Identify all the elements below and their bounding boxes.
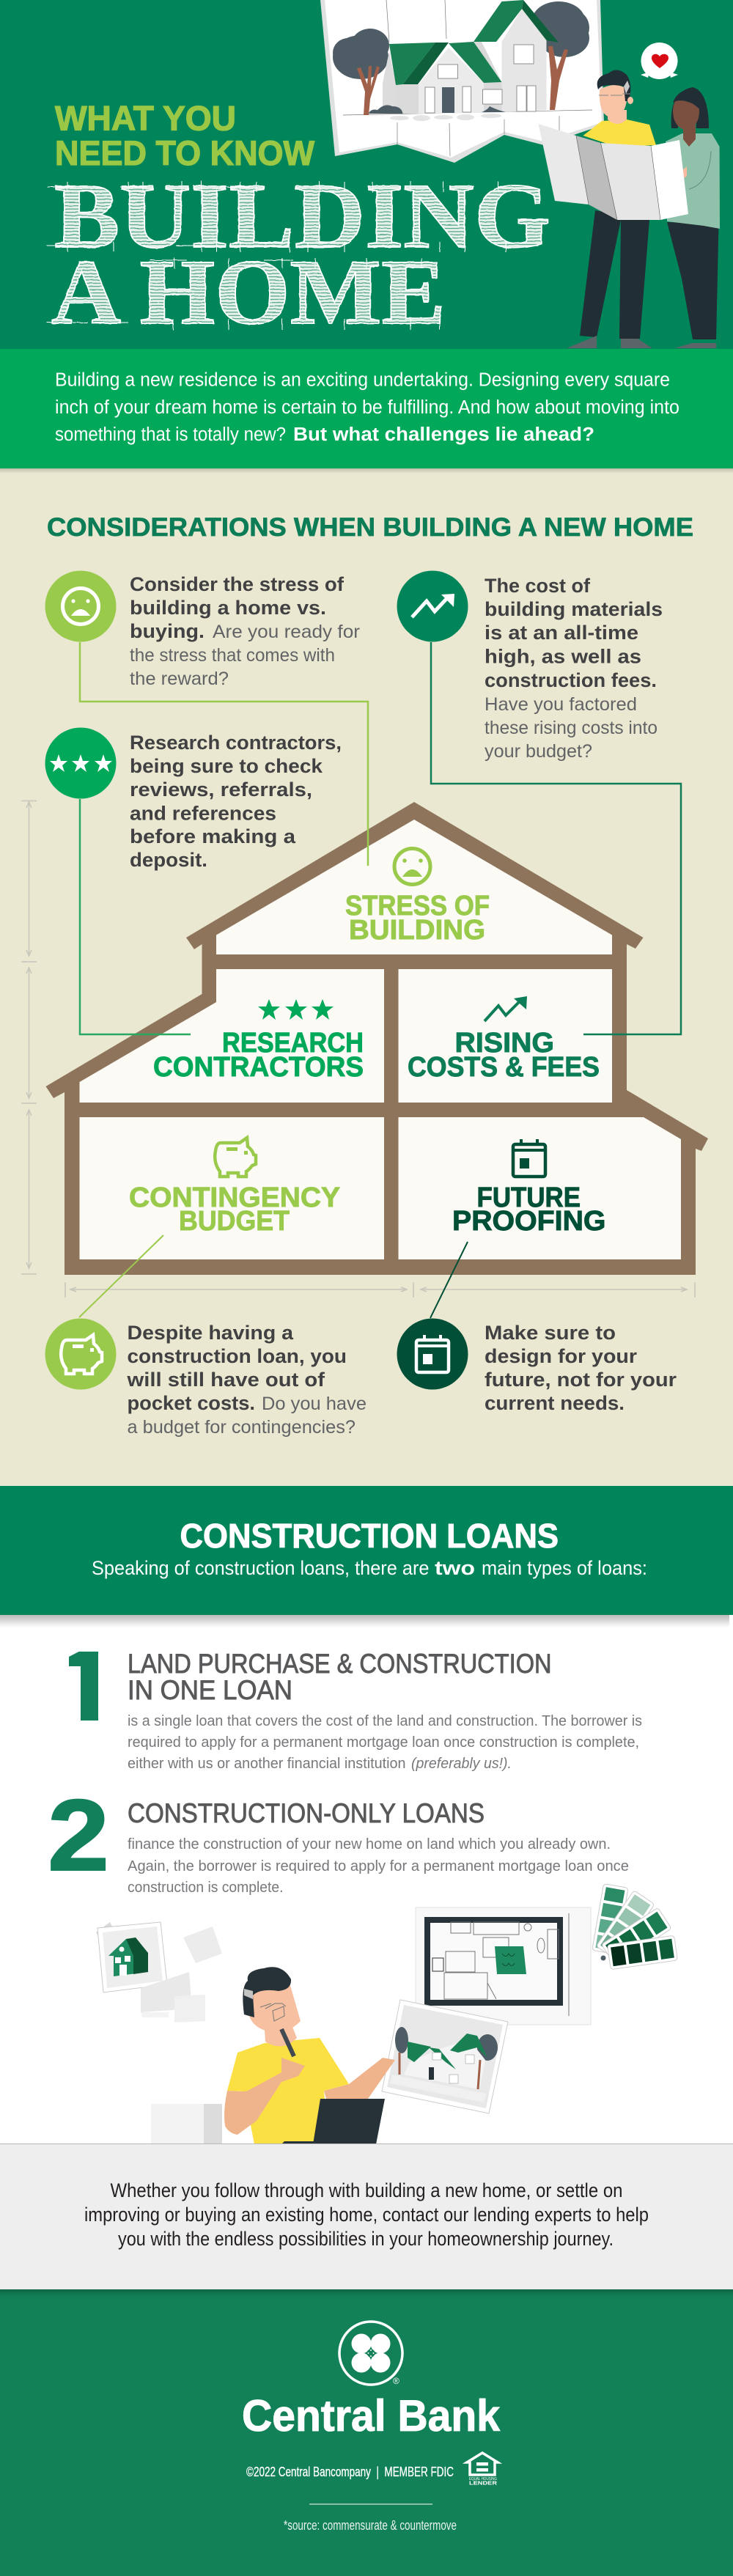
dimension lines — [21, 801, 695, 1298]
text: stress paragraph: the stress that comes with — [130, 645, 335, 666]
callout: future proofing — [397, 1318, 677, 1414]
house label: contingency budget: CONTINGENCY — [129, 1182, 340, 1213]
text: future paragraph — [485, 1322, 677, 1414]
banner: construction loans — [0, 1486, 733, 1615]
text: costs paragraph: Have you factored — [485, 694, 637, 715]
callout: research contractors — [45, 727, 342, 871]
illustration: door and windows — [369, 45, 536, 121]
icon: stars — [258, 999, 334, 1020]
loan 2: 2 — [48, 1779, 109, 1892]
icon: right tree — [532, 1, 589, 110]
text: intro paragraph: Building a new residence is an exciting undertaking. Designing every square — [55, 369, 670, 390]
house label: stress of building: BUILDING — [349, 915, 485, 946]
text: future paragraph: Make sure to — [485, 1322, 616, 1344]
text: future paragraph: future, not for your — [485, 1369, 677, 1391]
house label: contingency budget: BUDGET — [179, 1206, 290, 1237]
icon: stars circle — [45, 727, 116, 799]
banner: construction loans: Speaking of construction loans, there are — [92, 1557, 430, 1579]
loan 1: required to apply for a permanent mortgage loan once construction is complete, — [128, 1734, 639, 1751]
house label: stress of building: STRESS OF — [345, 891, 490, 921]
house label: research contractors: RESEARCH — [222, 1028, 364, 1059]
text: stress paragraph: the reward? — [130, 669, 229, 689]
text: research paragraph: reviews, referrals, — [130, 779, 312, 801]
loan 2: CONSTRUCTION-ONLY LOANS — [128, 1797, 485, 1828]
diagram: house cross-section — [45, 802, 708, 1275]
banner: construction loans: main types of loans: — [482, 1557, 647, 1579]
icon: calendar — [513, 1139, 545, 1177]
panel: considerations — [0, 468, 733, 1486]
panel: closing message: you with the endless possibilities in your homeownership journey. — [118, 2228, 614, 2250]
text: stress paragraph: building a home vs. — [130, 597, 326, 619]
banner: construction loans: CONSTRUCTION LOANS — [180, 1517, 559, 1555]
house label: rising costs: RISING — [454, 1028, 554, 1059]
loan 2: finance the construction of your new home on land which you already own. — [128, 1836, 611, 1852]
text: future paragraph: current needs. — [485, 1392, 625, 1414]
text: costs paragraph — [485, 575, 663, 762]
loan 1: 1 — [51, 1633, 121, 1742]
text: stress paragraph — [130, 573, 360, 689]
text: stress paragraph: buying. — [130, 620, 205, 642]
icon: equal housing lender — [467, 2453, 498, 2487]
text: contingency paragraph: Despite having a — [128, 1322, 293, 1344]
illustration: man thinking — [224, 1967, 395, 2144]
text: future paragraph: design for your — [485, 1345, 637, 1367]
illustration: floor plan — [416, 1907, 591, 2025]
icon: chart — [485, 996, 527, 1021]
text: contingency paragraph: will still have out of — [126, 1369, 325, 1391]
illustration: laptop — [281, 2099, 385, 2144]
title: what you need to know: WHAT YOU — [55, 98, 236, 138]
panel: footer — [0, 2289, 733, 2576]
text: costs paragraph: construction fees. — [485, 669, 657, 691]
text: research paragraph: before making a — [130, 825, 295, 847]
text: intro paragraph — [55, 369, 679, 445]
illustration: house blueprint — [320, 0, 604, 163]
loan 1: IN ONE LOAN — [128, 1674, 292, 1705]
title: what you need to know: NEED TO KNOW — [55, 133, 315, 172]
text: research paragraph — [130, 732, 342, 871]
loan 2: Again, the borrower is required to apply for a permanent mortgage loan once — [128, 1858, 629, 1874]
loan 1: either with us or another financial institution — [128, 1755, 406, 1772]
icon: equal housing lender: EQUAL HOUSING — [469, 2477, 497, 2481]
illustration: unfolded map — [538, 124, 688, 220]
icon: central bank logo: ® — [393, 2376, 399, 2386]
illustration: house photo — [382, 2000, 508, 2113]
text: contingency paragraph: pocket costs. — [128, 1392, 255, 1414]
text: research paragraph: deposit. — [130, 849, 207, 871]
text: research paragraph: being sure to check — [130, 755, 323, 777]
house label: rising costs: COSTS & FEES — [408, 1052, 600, 1083]
loan 1 — [69, 1652, 642, 1771]
text: costs paragraph: The cost of — [485, 575, 590, 597]
title: building a home — [47, 165, 550, 344]
callout: heart speech bubble — [641, 43, 678, 79]
logo text: central bank: Central Bank — [242, 2391, 501, 2440]
panel: loans — [0, 1486, 733, 2576]
text: contingency paragraph: construction loan, you — [128, 1345, 347, 1367]
panel: hero — [0, 0, 733, 349]
icon: colour swatch fan — [592, 1884, 677, 1970]
house label: future proofing: PROOFING — [452, 1206, 605, 1237]
text: research paragraph: Research contractors, — [130, 732, 342, 754]
panel: closing message: improving or buying an existing home, contact our lending experts to help — [84, 2204, 649, 2226]
text: stress paragraph: Are you ready for — [213, 622, 360, 642]
house label: research contractors — [153, 999, 364, 1083]
text: copyright: ©2022 Central Bancompany | MEMBER FDIC — [246, 2465, 454, 2479]
text: costs paragraph: is at an all-time — [485, 622, 638, 644]
text: intro paragraph: But what challenges lie ahead? — [293, 424, 594, 445]
icon: piggy bank circle — [45, 1318, 116, 1390]
icon: equal housing lender: LENDER — [469, 2481, 497, 2487]
house label: stress of building — [345, 849, 490, 946]
callout: contingency budget — [45, 1318, 366, 1438]
banner: construction loans: two — [435, 1557, 475, 1579]
title: building a home: A HOME — [51, 241, 446, 344]
house label: future proofing — [452, 1139, 605, 1237]
loan 2 — [48, 1779, 629, 1896]
text: intro paragraph: something that is totally new? — [55, 424, 286, 445]
illustration: paper stack — [151, 2104, 222, 2144]
heading: considerations: CONSIDERATIONS WHEN BUILDING A NEW HOME — [47, 513, 693, 542]
illustration: house roofs — [389, 0, 559, 85]
illustration: man — [545, 70, 656, 348]
illustration: woman — [666, 87, 720, 348]
loan 2: construction is complete. — [128, 1879, 283, 1896]
text: contingency paragraph: a budget for contingencies? — [128, 1417, 356, 1438]
icon: sad face circle — [45, 570, 116, 642]
text: source: *source: commensurate & countermove — [284, 2518, 457, 2533]
text: costs paragraph: high, as well as — [485, 645, 641, 667]
callout: rising costs — [397, 570, 663, 762]
house label: rising costs — [408, 996, 600, 1083]
loan 1: is a single loan that covers the cost of the land and construction. The borrower is — [128, 1712, 642, 1729]
connector lines — [79, 642, 681, 1318]
title: what you need to know — [55, 98, 315, 172]
decoration: loose papers — [141, 1927, 222, 2023]
text: contingency paragraph: Do you have — [262, 1394, 366, 1414]
text: research paragraph: and references — [130, 802, 276, 824]
loan 1: LAND PURCHASE & CONSTRUCTION — [128, 1648, 551, 1679]
text: costs paragraph: building materials — [485, 598, 663, 620]
icon: central bank logo — [339, 2322, 402, 2386]
panel: closing message — [0, 2143, 733, 2289]
house label: contingency budget — [129, 1138, 340, 1237]
illustration: house walls — [383, 9, 547, 114]
icon: small house card — [96, 1922, 167, 1992]
icon: calendar circle — [397, 1318, 468, 1390]
text: intro paragraph: inch of your dream home is certain to be fulfilling. And how about moving into — [55, 397, 679, 418]
callout: stress of building — [45, 570, 360, 689]
icon: piggy bank — [215, 1138, 256, 1177]
house label: research contractors: CONTRACTORS — [153, 1052, 364, 1083]
text: contingency paragraph — [126, 1322, 366, 1438]
icon: chart circle — [397, 570, 468, 642]
house label: future proofing: FUTURE — [476, 1182, 581, 1213]
illustration: man with plans — [96, 1884, 677, 2144]
loan 1: (preferably us!). — [411, 1755, 512, 1772]
text: stress paragraph: Consider the stress of — [130, 573, 344, 595]
text: costs paragraph: your budget? — [485, 741, 592, 762]
panel: intro band — [0, 349, 733, 468]
panel: closing message: Whether you follow through with building a new home, or settle on — [110, 2179, 623, 2201]
text: costs paragraph: these rising costs into — [485, 718, 658, 738]
icon: sad face — [394, 849, 430, 884]
icon: left tree — [333, 29, 389, 115]
title: building a home: BUILDING — [54, 165, 550, 268]
